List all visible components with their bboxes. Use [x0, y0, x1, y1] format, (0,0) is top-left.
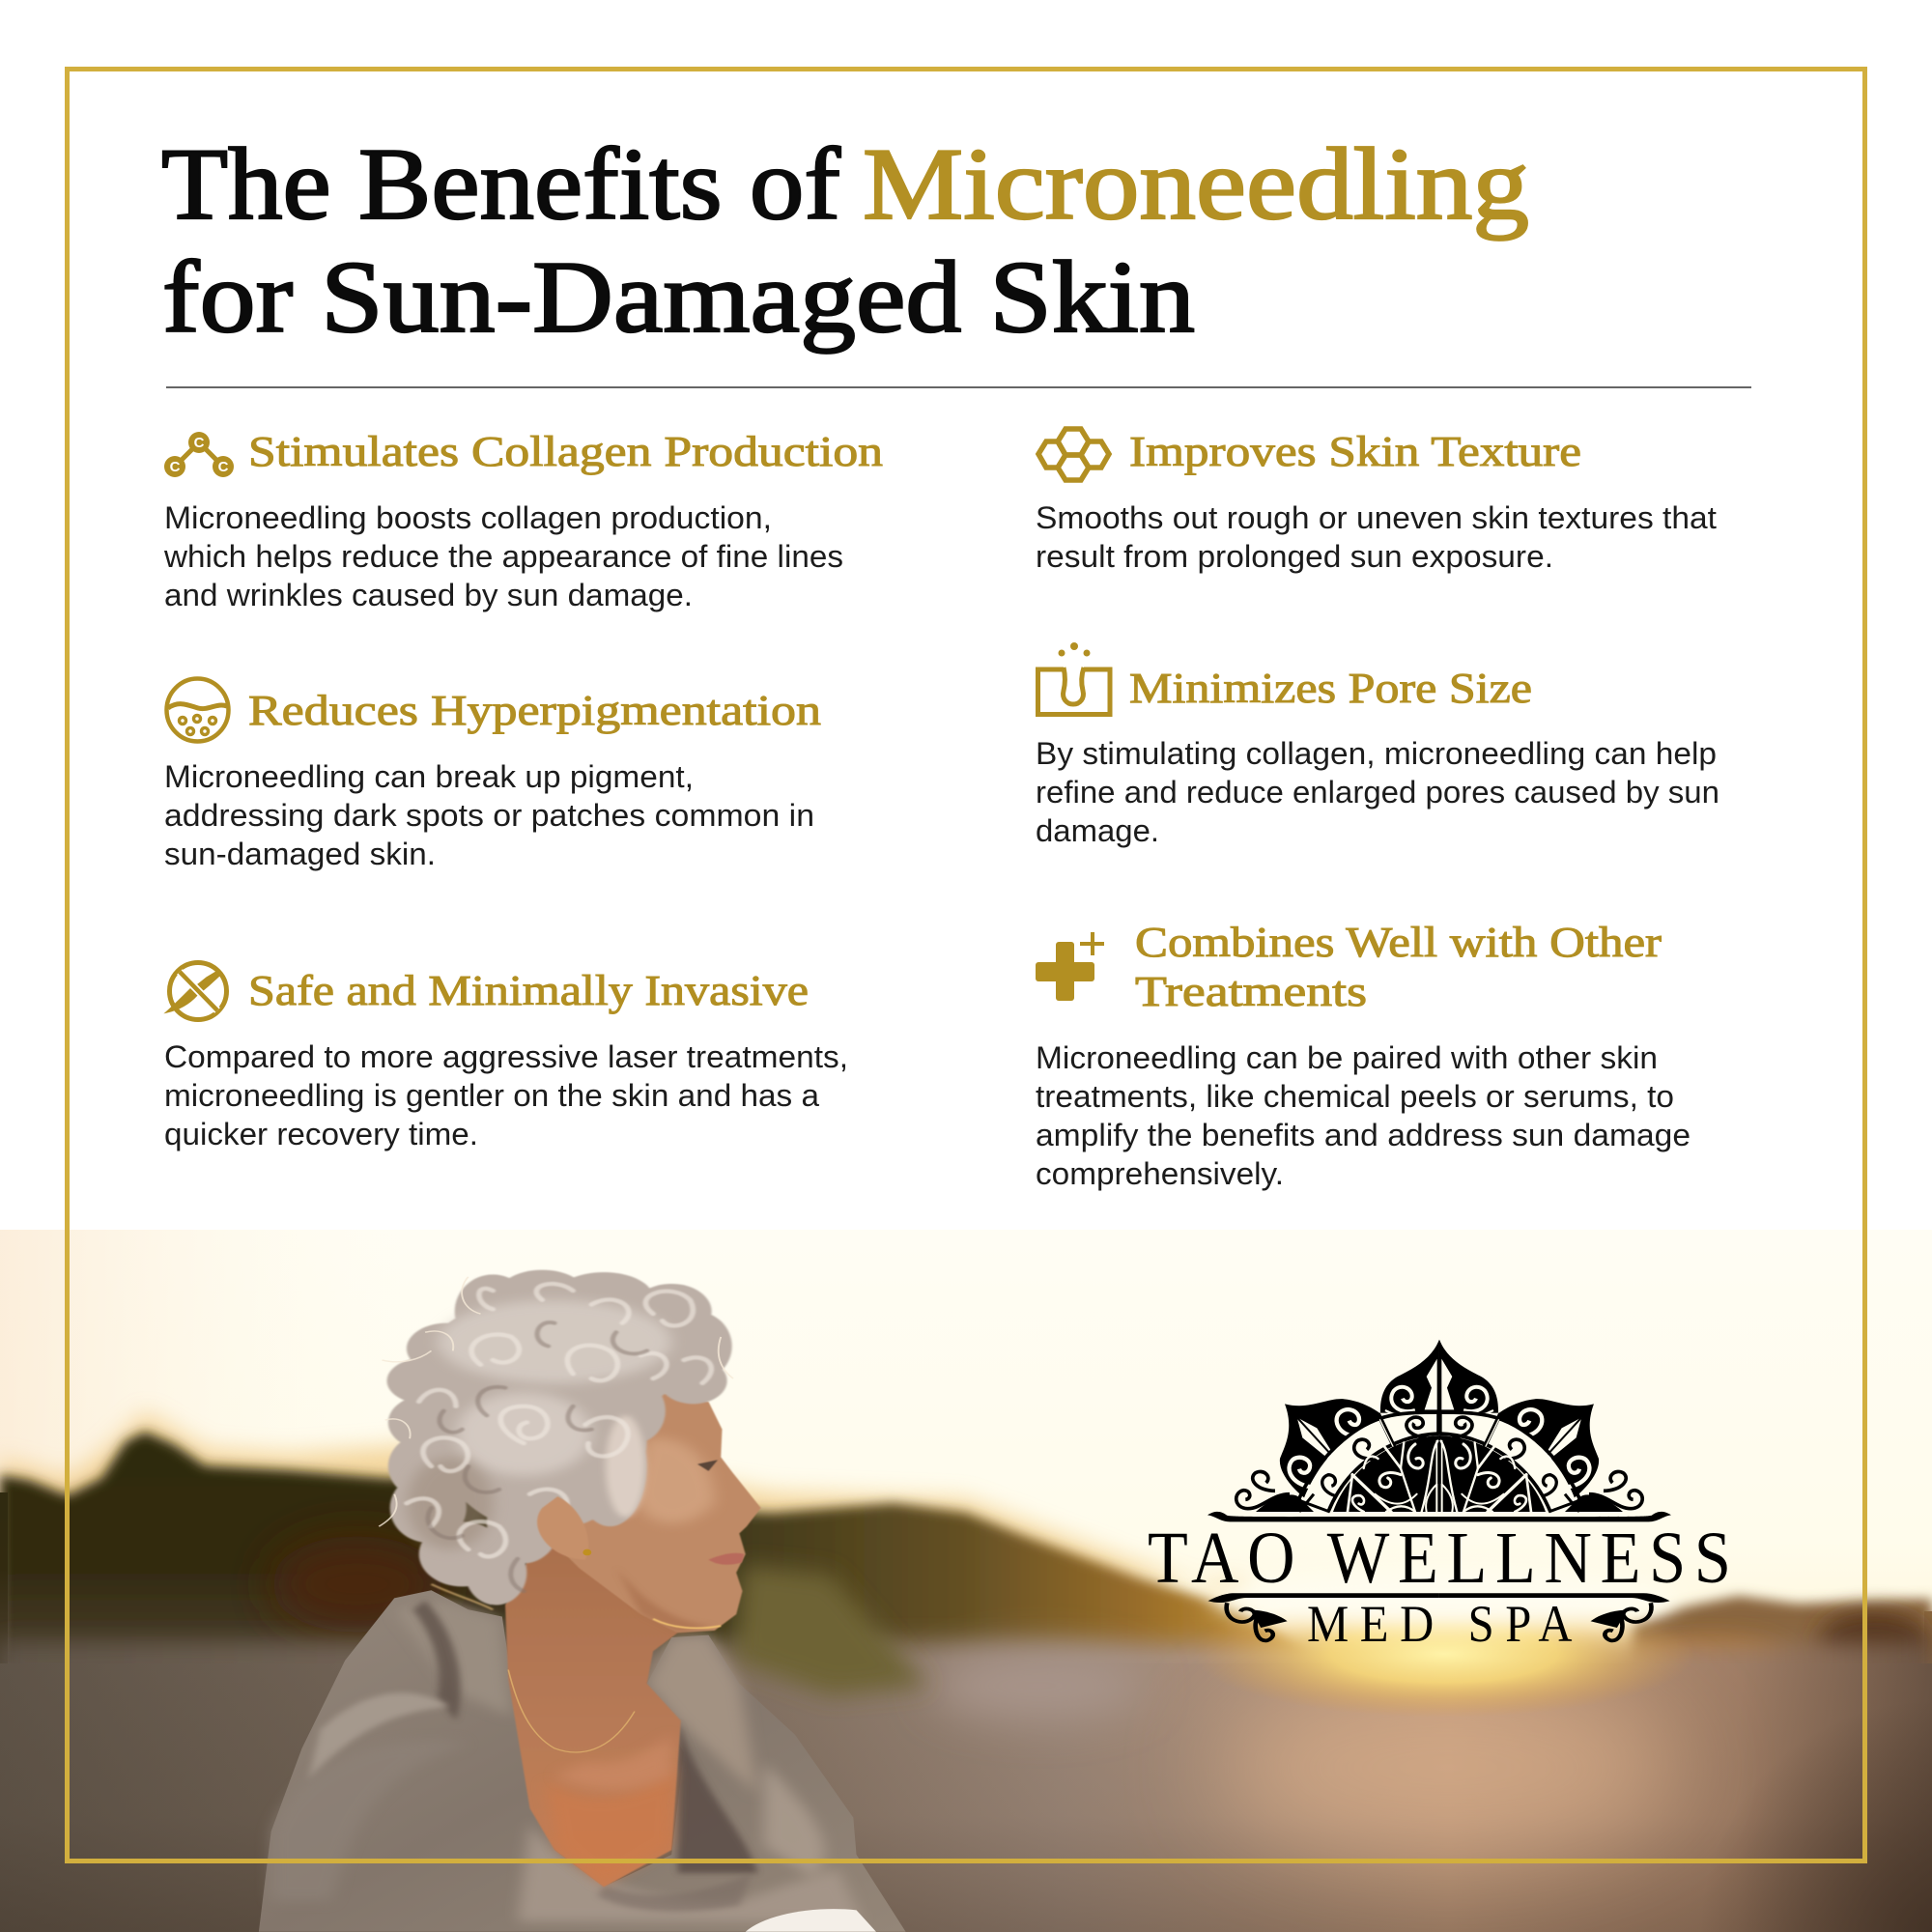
- body text: damage.: [1036, 813, 1159, 848]
- title: The Benefits of: [161, 128, 841, 241]
- panel: safe and minimally invasive: [164, 962, 848, 1151]
- body text: Compared to more aggressive laser treatments,: [164, 1039, 848, 1074]
- logo: Tao Wellness Med Spa: [1148, 1340, 1731, 1654]
- body text: comprehensively.: [1036, 1156, 1284, 1191]
- face: [568, 1393, 761, 1634]
- body text: Microneedling boosts collagen production,: [164, 500, 772, 535]
- body text: microneedling is gentler on the skin and has a: [164, 1078, 819, 1113]
- body text: [1036, 736, 1719, 848]
- sun glow: [1217, 1613, 1673, 1712]
- side petal: [1280, 1399, 1380, 1499]
- body text: sun-damaged skin.: [164, 837, 436, 871]
- title: for Sun-Damaged Skin: [162, 241, 1195, 354]
- body text: quicker recovery time.: [164, 1117, 478, 1151]
- panel: stimulates collagen production: [163, 428, 883, 612]
- treeline left: [0, 1432, 696, 1671]
- icon: collagen molecule: C: [194, 435, 205, 451]
- body text: addressing dark spots or patches common in: [164, 798, 814, 833]
- icon: skin pore: [1037, 642, 1110, 715]
- outer scrolls: [1256, 1494, 1314, 1512]
- body text: treatments, like chemical peels or serums, to: [1036, 1079, 1674, 1114]
- body text: and wrinkles caused by sun damage.: [164, 578, 693, 612]
- title: Microneedling: [863, 128, 1529, 241]
- dune: [734, 1565, 927, 1695]
- lower ornament: [1208, 1593, 1670, 1640]
- top petal: [1380, 1340, 1439, 1413]
- body text: [1036, 1040, 1690, 1191]
- treeline right: [1633, 1596, 1932, 1681]
- icon: honeycomb: [1038, 429, 1109, 480]
- heading: Reduces Hyperpigmentation: [248, 687, 821, 734]
- neck and chest: [505, 1531, 681, 1887]
- body text: refine and reduce enlarged pores caused by sun: [1036, 775, 1719, 810]
- logo tagline: MED SPA: [1307, 1596, 1573, 1654]
- woman figure: [259, 1270, 906, 1932]
- panel: reduces hyperpigmentation: [164, 678, 821, 871]
- panel: improves skin texture: [1036, 428, 1717, 574]
- arc band: [1302, 1413, 1439, 1512]
- body text: [1036, 500, 1717, 574]
- title divider: [166, 386, 1751, 388]
- icon: plus signs: [1036, 932, 1104, 1001]
- heading: Treatments: [1135, 968, 1367, 1015]
- icon: crossed-out needle: [166, 962, 226, 1020]
- hair: [387, 1270, 732, 1605]
- heading: Safe and Minimally Invasive: [248, 967, 809, 1014]
- heading: Combines Well with Other: [1135, 919, 1662, 966]
- heading: Stimulates Collagen Production: [248, 428, 883, 475]
- heading: Improves Skin Texture: [1129, 428, 1581, 475]
- body text: Microneedling can break up pigment,: [164, 759, 694, 794]
- warm rim above trees: [0, 1412, 1246, 1604]
- panel: combines well with other treatments: [1036, 919, 1690, 1191]
- body text: [164, 1039, 848, 1151]
- inner medallion: [1333, 1435, 1439, 1512]
- ground: [0, 1629, 1932, 1663]
- panel: minimizes pore size: [1036, 642, 1719, 848]
- white trousers: [746, 1909, 876, 1932]
- background photo: woman on beach at sunset: [0, 1230, 1932, 1932]
- logo wordmark: TAO WELLNESS: [1148, 1518, 1731, 1599]
- title: [161, 128, 1529, 354]
- body text: Microneedling can be paired with other skin: [1036, 1040, 1658, 1075]
- icon: collagen molecule: C: [170, 459, 181, 475]
- heading: [1135, 919, 1662, 1015]
- icon: skin cross-section: [166, 678, 228, 742]
- treeline centre to gold: [657, 1503, 1314, 1671]
- logo mandala: [1208, 1340, 1671, 1521]
- ear: [537, 1496, 583, 1557]
- body text: [163, 500, 843, 612]
- body text: Smooths out rough or uneven skin textures that: [1036, 500, 1717, 535]
- icon: collagen molecule: C: [218, 459, 229, 475]
- body text: By stimulating collagen, microneedling can help: [1036, 736, 1717, 771]
- body text: which helps reduce the appearance of fine lines: [163, 539, 843, 574]
- body text: amplify the benefits and address sun damage: [1036, 1118, 1690, 1152]
- body text: result from prolonged sun exposure.: [1036, 539, 1553, 574]
- body text: [164, 759, 814, 871]
- shawl: [259, 1590, 906, 1932]
- heading: Minimizes Pore Size: [1129, 665, 1532, 712]
- base bar: [1208, 1512, 1439, 1521]
- icon: collagen molecule: [164, 432, 234, 477]
